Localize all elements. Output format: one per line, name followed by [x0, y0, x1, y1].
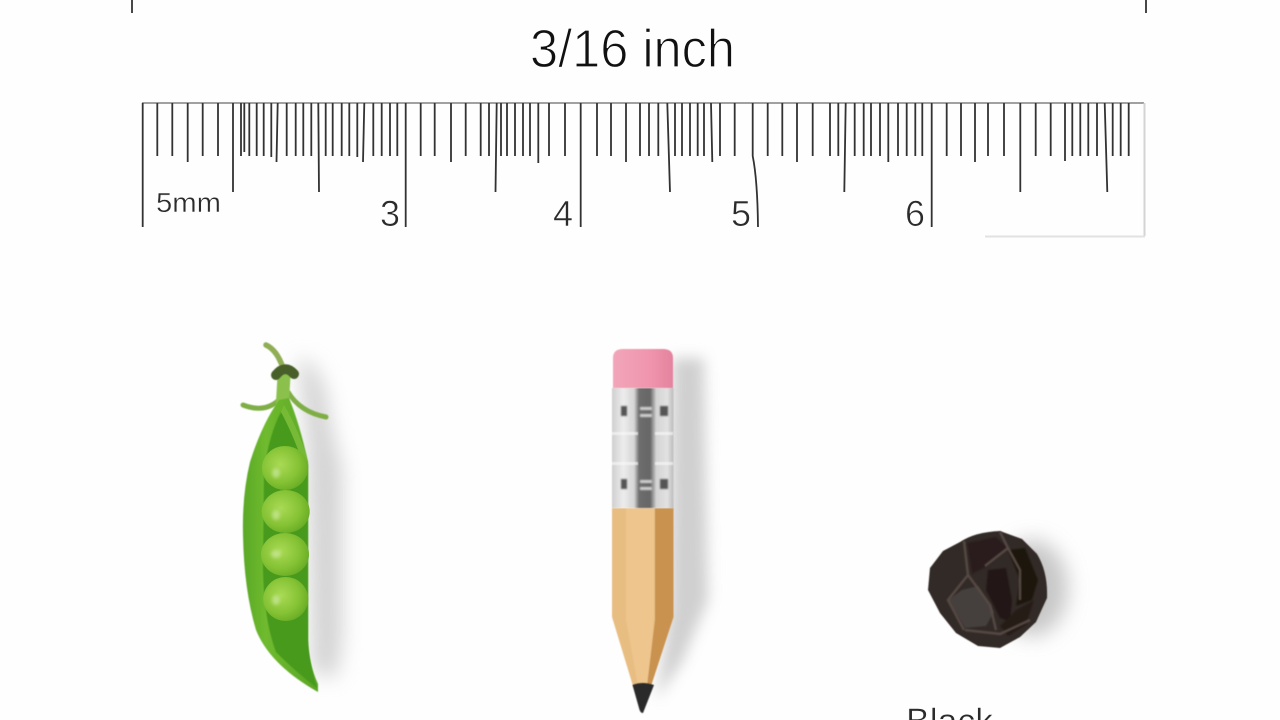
- pea pod shadow: [298, 358, 342, 678]
- ruler label: 5: 5: [731, 193, 751, 234]
- pea pod right lip: [281, 405, 308, 476]
- peppercorn dark cells: [967, 537, 1038, 636]
- peppercorn grey facet: [948, 586, 994, 628]
- icon: pea pod: [243, 345, 342, 692]
- pea pod interior: [263, 412, 317, 688]
- top ruler end marks: [132, 0, 1146, 13]
- peppercorn body: [928, 531, 1047, 648]
- pencil shadow: [656, 358, 708, 700]
- ruler label: 3: 3: [380, 193, 400, 234]
- pencil ferrule: [612, 388, 674, 508]
- ruler label: 6: 6: [905, 193, 925, 234]
- pencil wood body: [612, 508, 674, 686]
- title: 3/16 inch: [530, 19, 735, 79]
- peas: [261, 446, 310, 621]
- ruler body edges: [142, 102, 1146, 238]
- ruler label: 4: 4: [553, 193, 573, 234]
- peppercorn shadow: [996, 540, 1068, 636]
- ruler tick marks: [143, 103, 1129, 227]
- pea pod stem and sepals: [243, 345, 326, 417]
- pencil lead tip: [632, 683, 654, 713]
- peppercorn ridges: [948, 532, 1030, 634]
- icon: pencil: [612, 349, 708, 713]
- icon: black peppercorn: [928, 531, 1068, 648]
- ruler label: 5mm: 5mm: [156, 187, 221, 218]
- ruler: [142, 102, 1146, 238]
- pencil eraser: [613, 349, 673, 388]
- pea pod shell: [243, 398, 318, 692]
